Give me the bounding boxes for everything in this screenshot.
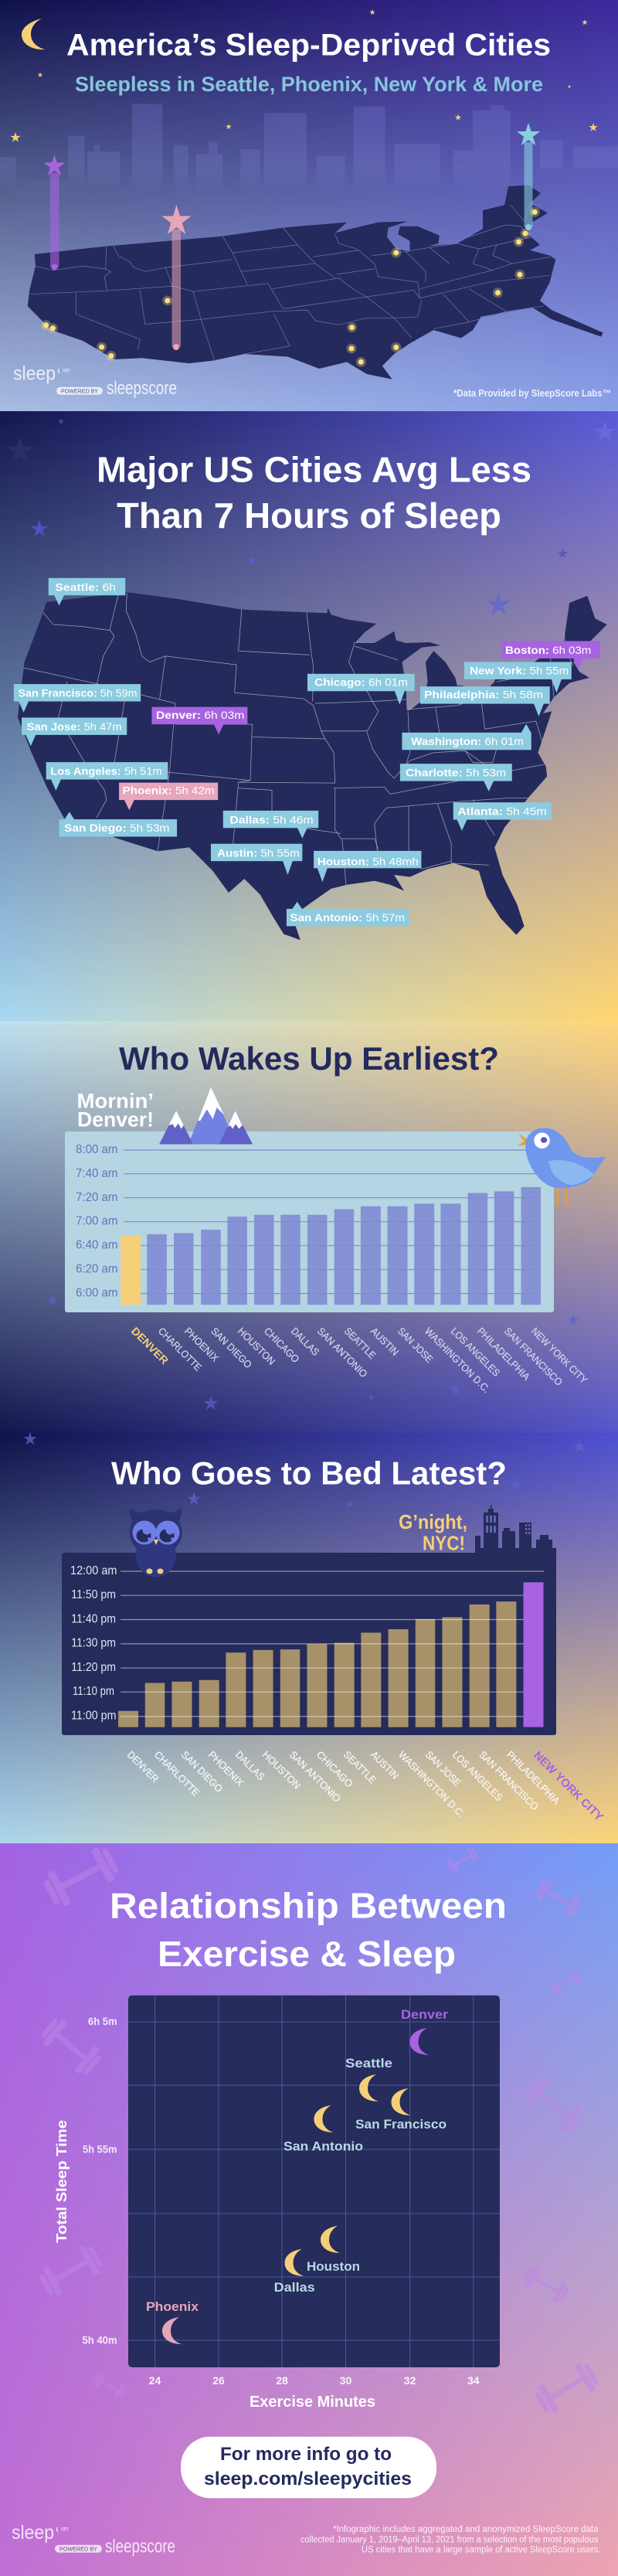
logo: sleep.com powered by sleepscore: POWERED BY xyxy=(61,389,98,394)
city labels: LOS ANGELES xyxy=(449,1325,502,1379)
point: Denver xyxy=(401,2007,448,2055)
point: Houston xyxy=(307,2226,360,2274)
x-axis labels: 26 xyxy=(212,2374,225,2387)
x-axis labels: 24 xyxy=(149,2374,161,2387)
point: San Antonio: San Antonio xyxy=(284,2139,363,2154)
y-axis labels: 7:20 am xyxy=(76,1191,117,1204)
city labels: WASHINGTON D.C. xyxy=(396,1749,467,1819)
city labels: PHOENIX xyxy=(182,1325,221,1364)
label: Los Angeles: Los Angeles: 5h 51m xyxy=(50,765,162,778)
y-axis labels: 6:20 am xyxy=(76,1262,117,1275)
label: Houston: Houston: 5h 48mh xyxy=(317,856,419,868)
label: Charlotte: Charlotte: 5h 53m xyxy=(406,767,506,779)
y-axis labels xyxy=(76,1143,117,1299)
y-axis labels: 6:40 am xyxy=(76,1238,117,1252)
background xyxy=(0,0,618,411)
grid lines xyxy=(121,1571,544,1717)
label: Denver: Denver: 6h 03m xyxy=(156,710,244,722)
city labels: DENVER xyxy=(129,1325,171,1366)
label: Seattle xyxy=(49,578,125,606)
y-axis labels: 11:00 pm xyxy=(71,1710,116,1722)
label: San Diego: San Diego: 5h 53m xyxy=(64,822,169,835)
y-axis labels: 7:00 am xyxy=(76,1215,117,1227)
heading: Relationship Between xyxy=(110,1886,507,1926)
y-axis labels: 6h 5m xyxy=(88,2016,117,2027)
y-axis title: Total Sleep Time xyxy=(54,2120,70,2243)
city skyline xyxy=(0,104,618,189)
call to action button xyxy=(181,2437,436,2498)
footnote xyxy=(301,2525,601,2555)
background xyxy=(0,1843,618,2576)
label: New York: New York: 5h 55m xyxy=(470,665,569,677)
city labels xyxy=(125,1749,606,1824)
city labels: PHILADELPHIA xyxy=(504,1749,562,1807)
label: Washington xyxy=(402,724,531,750)
label: San Antonio: San Antonio: 5h 57m xyxy=(290,912,405,924)
label: Chicago xyxy=(307,674,415,705)
label: Chicago: Chicago: 6h 01m xyxy=(314,677,408,689)
heading: Exercise & Sleep xyxy=(158,1934,456,1974)
city labels: WASHINGTON D.C. xyxy=(423,1325,492,1395)
point: Phoenix xyxy=(146,2299,199,2344)
city labels: SAN FRANCISCO xyxy=(502,1325,565,1388)
city labels xyxy=(129,1325,590,1395)
logo: sleep.com powered by sleepscore xyxy=(13,363,177,399)
y-axis labels xyxy=(70,1564,117,1722)
label: San Jose: San Jose: 5h 47m xyxy=(27,721,122,733)
label: San Antonio xyxy=(287,902,409,926)
dumbbell decorations xyxy=(36,1843,601,2418)
point: Houston: Houston xyxy=(307,2259,360,2274)
city labels: SAN JOSE xyxy=(396,1325,436,1365)
city labels: PHOENIX xyxy=(206,1749,246,1788)
label: Seattle: Seattle: 6h xyxy=(55,582,116,594)
title: America’s Sleep-Deprived Cities xyxy=(66,28,551,62)
purple Seattle beam and star xyxy=(43,155,66,271)
city labels: SEATTLE xyxy=(342,1325,379,1361)
y-axis labels: 6:00 am xyxy=(76,1286,117,1299)
heading: Major US Cities Avg Less xyxy=(97,449,531,489)
pink Phoenix beam and star xyxy=(161,205,192,350)
city labels: DENVER xyxy=(125,1749,161,1785)
point: Phoenix: Phoenix xyxy=(146,2299,199,2314)
subtitle: Sleepless in Seattle, Phoenix, New York & More xyxy=(75,73,543,96)
callout: Mornin' Denver: Mornin’ xyxy=(77,1090,154,1113)
footnote: US cities that have a large sample of active SleepScore users. xyxy=(362,2546,601,2555)
heading: Than 7 Hours of Sleep xyxy=(117,495,501,536)
background xyxy=(0,1021,618,1433)
city labels: SAN FRANCISCO xyxy=(477,1749,541,1812)
grid lines xyxy=(124,1150,541,1294)
chart panel xyxy=(62,1553,556,1735)
callout: G'night NYC: NYC! xyxy=(423,1532,465,1555)
callout: G'night NYC: G’night, xyxy=(399,1510,467,1533)
city labels: DALLAS xyxy=(289,1325,322,1358)
small stars xyxy=(10,9,598,142)
chart: wake-up times xyxy=(76,1143,541,1305)
call to action button: sleep.com/sleepycities xyxy=(204,2469,412,2489)
label: Phoenix xyxy=(119,783,218,810)
heading: Who Goes to Bed Latest? xyxy=(111,1455,507,1492)
section: average sleep by city xyxy=(0,411,618,1021)
chart panel xyxy=(65,1131,554,1312)
label: Boston: Boston: 6h 03m xyxy=(505,645,591,657)
point: Denver: Denver xyxy=(401,2007,448,2022)
map and labels xyxy=(6,418,616,940)
bars xyxy=(118,1601,516,1727)
city dots xyxy=(41,207,540,367)
callout: Mornin' Denver: Denver! xyxy=(77,1108,154,1131)
logo: sleep.com powered by sleepscore: sleepscore xyxy=(105,2537,175,2557)
point: Seattle xyxy=(345,2056,392,2101)
section: exercise and sleep xyxy=(0,1843,618,2576)
call to action button: For more info go to xyxy=(220,2444,392,2465)
label: Philadelphia xyxy=(420,686,550,716)
y-axis labels: 11:10 pm xyxy=(73,1685,114,1698)
US map xyxy=(18,592,607,940)
label: San Francisco xyxy=(14,684,141,713)
point: San Francisco: San Francisco xyxy=(355,2117,447,2132)
label: San Jose xyxy=(22,717,127,746)
point: Dallas xyxy=(274,2249,315,2295)
city labels: CHARLOTTE xyxy=(156,1325,204,1373)
logo: sleep.com powered by sleepscore: sleep xyxy=(13,363,56,385)
icon: bluebird xyxy=(517,1128,606,1206)
label: Austin xyxy=(211,844,302,875)
label: Phoenix: Phoenix: 5h 42m xyxy=(123,784,215,797)
label: Dallas xyxy=(223,811,318,839)
y-axis labels: 12:00 am xyxy=(70,1564,117,1577)
label: Washington: Washington: 6h 01m xyxy=(411,736,524,748)
x-axis labels: 30 xyxy=(340,2374,351,2387)
city labels: SAN DIEGO xyxy=(209,1325,254,1370)
x-axis labels: 28 xyxy=(276,2374,288,2387)
city labels: SAN ANTONIO xyxy=(287,1749,343,1805)
label: Philadelphia: Philadelphia: 5h 58m xyxy=(424,689,543,701)
city labels: SEATTLE xyxy=(341,1749,379,1786)
background stars xyxy=(6,418,616,614)
city labels: PHILADELPHIA xyxy=(475,1325,532,1383)
background xyxy=(0,1433,618,1843)
footnote: *Infographic includes aggregated and anonymized SleepScore data xyxy=(333,2525,599,2534)
logo: sleep.com powered by sleepscore: sleepscore xyxy=(107,378,177,399)
y-axis labels: 5h 40m xyxy=(82,2335,117,2346)
scatter plot xyxy=(54,1996,500,2411)
stars xyxy=(23,1432,586,1508)
city labels: SAN JOSE xyxy=(423,1749,464,1788)
callout: Mornin' Denver xyxy=(77,1090,154,1131)
city labels: SAN DIEGO xyxy=(179,1749,225,1795)
footnote: collected January 1, 2019–April 13, 2021 from a selection of the most populous xyxy=(301,2535,599,2544)
chart: bedtimes xyxy=(70,1564,544,1727)
city labels: HOUSTON xyxy=(236,1325,277,1367)
x-axis title: Exercise Minutes xyxy=(250,2394,375,2411)
y-axis labels: 5h 55m xyxy=(83,2144,117,2156)
section: intro hero xyxy=(0,0,618,411)
label: Atlanta xyxy=(453,802,552,831)
point: San Francisco xyxy=(355,2088,447,2132)
y-axis labels: 11:20 pm xyxy=(71,1661,116,1674)
section: who wakes up earliest xyxy=(0,1021,618,1438)
y-axis labels xyxy=(82,2016,117,2346)
y-axis labels: 11:40 pm xyxy=(71,1612,116,1626)
point: San Antonio xyxy=(284,2105,363,2154)
background xyxy=(0,411,618,1021)
city labels: SAN ANTONIO xyxy=(315,1325,370,1380)
city labels: AUSTIN xyxy=(368,1325,401,1358)
city labels: HOUSTON xyxy=(260,1749,303,1792)
heading: Who Wakes Up Earliest? xyxy=(119,1040,499,1077)
label: Austin: Austin: 5h 55m xyxy=(217,848,300,860)
label: Dallas: Dallas: 5h 46m xyxy=(229,815,314,827)
label: San Diego xyxy=(59,812,177,837)
label: Houston xyxy=(314,851,421,882)
callout: G'night NYC xyxy=(399,1510,467,1555)
highlighted bar: New York City xyxy=(524,1582,544,1727)
label: Charlotte xyxy=(400,764,512,791)
x-axis labels xyxy=(149,2374,480,2387)
logo: sleep.com powered by sleepscore: POWERED BY xyxy=(59,2547,97,2552)
icon: mountains xyxy=(159,1087,253,1144)
city labels: NEW YORK CITY xyxy=(529,1325,590,1386)
logo: sleep.com powered by sleepscore: sleep xyxy=(12,2522,54,2544)
label: Boston xyxy=(501,641,600,670)
city labels: LOS ANGELES xyxy=(450,1749,505,1803)
logo: sleep.com powered by sleepscore: om xyxy=(61,2524,68,2532)
city labels: CHICAGO xyxy=(314,1749,355,1790)
city labels: CHICAGO xyxy=(262,1325,301,1365)
point: Dallas: Dallas xyxy=(274,2280,315,2295)
y-axis labels: 8:00 am xyxy=(76,1143,117,1156)
y-axis labels: 7:40 am xyxy=(76,1167,117,1180)
section: who goes to bed latest xyxy=(0,1432,618,1843)
y-axis labels: 11:30 pm xyxy=(71,1637,116,1649)
US map, tilted xyxy=(28,185,603,379)
city labels: CHARLOTTE xyxy=(152,1749,202,1798)
blue New York beam and star xyxy=(517,123,540,230)
heading xyxy=(97,449,531,536)
y-axis labels: 11:50 pm xyxy=(71,1588,116,1601)
heading xyxy=(110,1886,507,1974)
bars xyxy=(121,1187,541,1305)
plot panel xyxy=(128,1996,500,2367)
logo: sleep.com powered by sleepscore: om xyxy=(63,366,70,374)
x-axis labels: 32 xyxy=(404,2374,416,2387)
icon: NYC skyline xyxy=(475,1505,556,1555)
label: Denver xyxy=(151,707,247,734)
stars xyxy=(26,1295,579,1438)
city labels: DALLAS xyxy=(233,1749,267,1783)
label: Los Angeles xyxy=(46,762,168,791)
grid lines xyxy=(128,1996,500,2367)
label: Atlanta: Atlanta: 5h 45m xyxy=(457,805,547,818)
city labels: NEW YORK CITY xyxy=(531,1749,606,1824)
city labels: AUSTIN xyxy=(368,1749,401,1781)
icon: crescent moon xyxy=(22,19,45,49)
logo: sleep.com powered by sleepscore xyxy=(12,2522,175,2557)
point: Seattle: Seattle xyxy=(345,2056,392,2071)
label: San Francisco: San Francisco: 5h 59m xyxy=(18,687,138,699)
x-axis labels: 34 xyxy=(467,2374,480,2387)
label: New York xyxy=(464,662,572,692)
icon: owl xyxy=(130,1508,182,1577)
